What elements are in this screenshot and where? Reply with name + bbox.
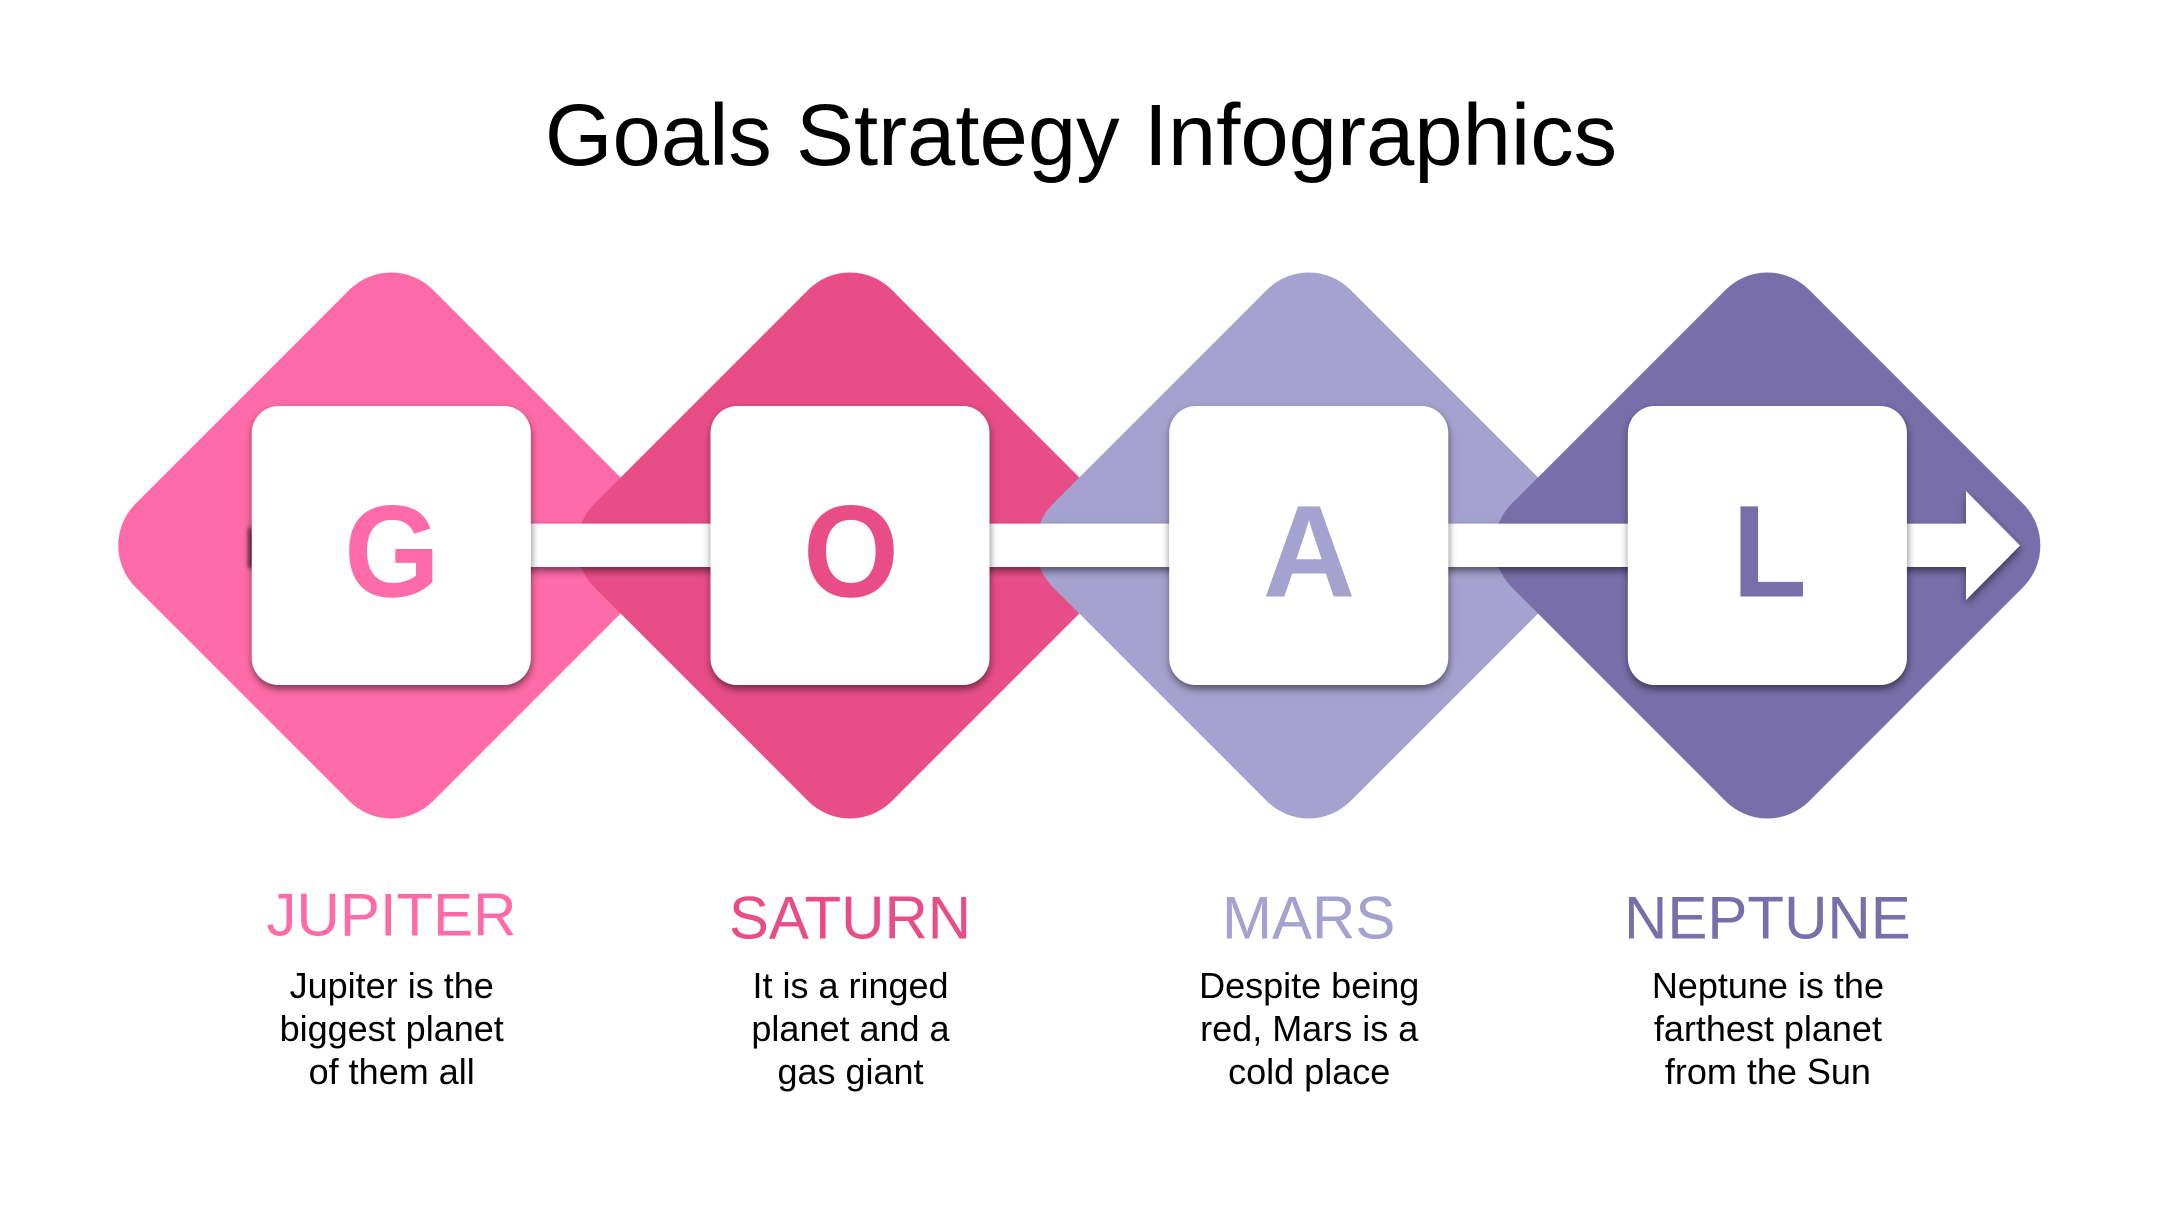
text block: jupiter bbox=[266, 882, 517, 1092]
card: A bbox=[1169, 406, 1448, 685]
text block: jupiter: Jupiter is the bbox=[290, 965, 494, 1006]
text block: jupiter: of them all bbox=[309, 1051, 475, 1092]
card: G bbox=[252, 406, 531, 685]
card: A: A bbox=[1263, 479, 1355, 625]
arrow bbox=[254, 491, 2020, 600]
title: Goals Strategy Infographics bbox=[545, 87, 1617, 184]
text block: neptune: NEPTUNE bbox=[1624, 884, 1911, 952]
text block: saturn: gas giant bbox=[777, 1051, 924, 1092]
text block: saturn: SATURN bbox=[729, 884, 971, 952]
text block: mars: Despite being bbox=[1199, 965, 1419, 1006]
text block: mars: MARS bbox=[1222, 884, 1395, 952]
text block: saturn bbox=[729, 884, 971, 1092]
card: O: O bbox=[803, 478, 899, 624]
diamond: mars bbox=[1011, 248, 1606, 843]
card: L bbox=[1628, 406, 1907, 685]
text block: mars bbox=[1199, 884, 1419, 1092]
text block: mars: red, Mars is a bbox=[1200, 1008, 1419, 1049]
text block: neptune: farthest planet bbox=[1654, 1008, 1882, 1049]
card: G: G bbox=[344, 478, 440, 624]
diamond: saturn bbox=[553, 248, 1147, 843]
text block: neptune: Neptune is the bbox=[1652, 965, 1884, 1006]
diamond: jupiter bbox=[94, 248, 689, 843]
text block: jupiter: JUPITER bbox=[266, 882, 517, 948]
text block: neptune: from the Sun bbox=[1665, 1051, 1871, 1092]
diamonds row bbox=[94, 248, 2065, 843]
diamond: neptune bbox=[1470, 248, 2065, 843]
text block: saturn: planet and a bbox=[751, 1008, 951, 1049]
text block: saturn: It is a ringed bbox=[752, 965, 949, 1006]
card: L: L bbox=[1732, 477, 1807, 624]
text block: mars: cold place bbox=[1228, 1051, 1390, 1092]
card: O bbox=[710, 406, 990, 685]
text block: jupiter: biggest planet bbox=[280, 1008, 504, 1049]
text block: neptune bbox=[1624, 884, 1911, 1092]
